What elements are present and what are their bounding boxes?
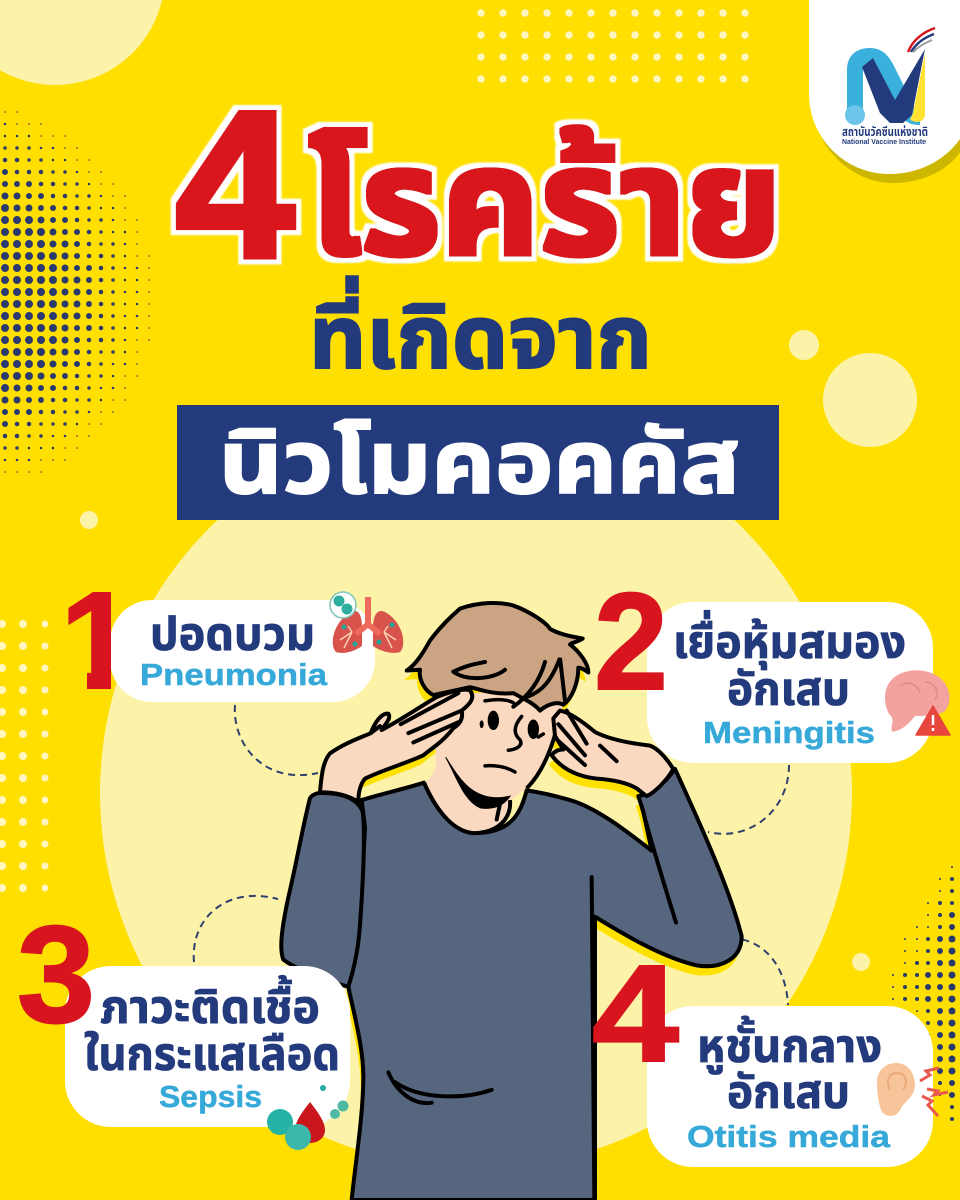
sweater (348, 769, 742, 1200)
sepsis text: Sepsis (159, 1079, 262, 1114)
title line 1: โรคร้าย (308, 118, 782, 286)
icon: blood cells (267, 1085, 348, 1150)
otitis text: Otitis media (687, 1119, 891, 1154)
title banner: นิวโมคอคคัส (219, 413, 740, 512)
left sleeve (281, 793, 364, 987)
pneumonia text: Pneumonia (140, 657, 328, 692)
sepsis text (84, 975, 340, 1114)
otitis text (687, 1016, 891, 1154)
dashed connector 4 (707, 938, 788, 1005)
title line 1 (175, 67, 782, 302)
white dot grid top (481, 13, 750, 79)
sepsis text: ในกระแสเลือด (84, 1028, 340, 1080)
pneumonia text (140, 608, 328, 692)
logo text (842, 125, 928, 146)
number 3: 3 (17, 898, 95, 1052)
halftone dots right (893, 867, 952, 1130)
number 2: 2 (594, 565, 668, 719)
meningitis text: อักเสบ (727, 663, 850, 715)
logo text: สถาบันวัคซีนแห่งชาติ (842, 125, 928, 139)
logo tab (809, 0, 960, 183)
otitis text: หูชั้นกลาง (697, 1016, 882, 1074)
icon: lungs (330, 592, 403, 653)
pneumonia text: ปอดบวม (150, 608, 315, 660)
icon: ear (877, 1063, 948, 1116)
person illustration (281, 603, 742, 1200)
icon: brain with warning (885, 670, 950, 735)
sepsis text: ภาวะติดเชื้อ (100, 975, 320, 1033)
meningitis text (673, 610, 906, 750)
logo mark (845, 28, 935, 125)
number 1: 1 (60, 564, 137, 718)
panel: pneumonia bubble (110, 600, 375, 702)
dashed connector 1 (235, 705, 318, 775)
white dot grid left (2, 624, 45, 890)
title banner (177, 405, 779, 520)
meningitis text: เยื่อหุ้มสมอง (673, 610, 906, 670)
logo text: National Vaccine Institute (842, 137, 926, 146)
hair (407, 603, 588, 711)
left hand (320, 690, 472, 802)
number 4: 4 (592, 937, 679, 1091)
dashed connector 3 (194, 896, 278, 962)
panel: otitis bubble (647, 1006, 933, 1167)
halftone dots left (5, 112, 149, 480)
face (424, 691, 563, 833)
panel: meningitis bubble (647, 602, 933, 763)
panel: sepsis bubble (65, 966, 350, 1127)
title line 1: 4 (175, 67, 295, 302)
dashed connector 2 (708, 765, 789, 834)
title line 2: ที่เกิดจาก (309, 276, 652, 387)
right hand (552, 711, 673, 796)
meningitis text: Meningitis (703, 715, 875, 750)
person shadow (317, 612, 739, 1200)
otitis text: อักเสบ (727, 1066, 850, 1118)
sweater folds (388, 806, 676, 1200)
